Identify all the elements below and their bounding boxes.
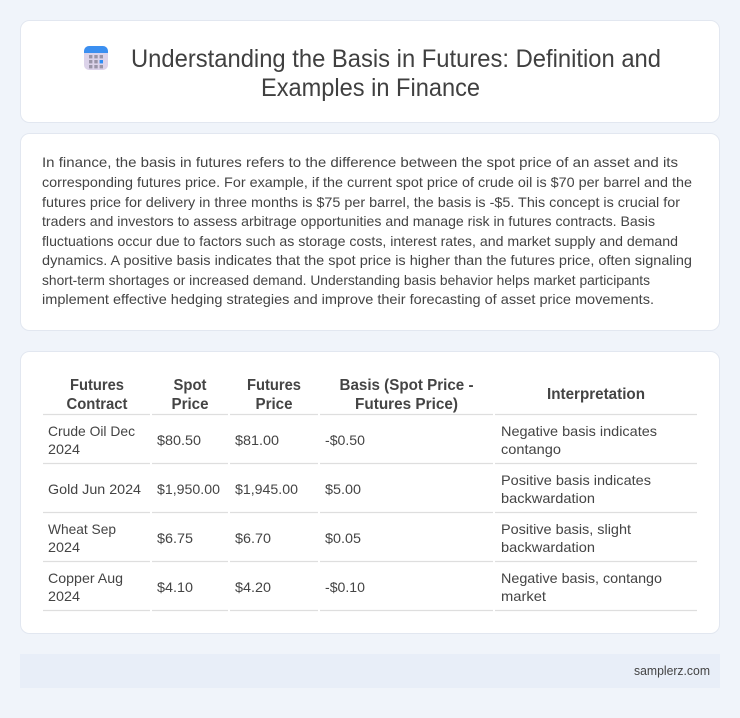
table row: wheat: Wheat Sep [48,521,116,537]
table row: gold: Gold Jun 2024 [48,481,141,497]
title: Examples in Finance [261,74,480,102]
text block: definition: implement effective hedging strategies and improve their forecasting of asset price movements. [42,291,654,307]
title [131,45,661,102]
table row: wheat: $6.70 [235,530,271,546]
table row: wheat: backwardation [501,539,595,555]
panel: intro paragraph [20,134,720,330]
table row: wheat: Positive basis, slight [501,521,631,537]
table row: copper: Copper Aug [48,570,123,586]
panel: futures table [20,352,720,634]
table row: copper [48,570,662,604]
table row: gold [48,472,651,506]
table header row: Contract [66,396,128,413]
table header row [66,377,645,413]
text block: definition: traders and investors to assess arbitrage opportunities and manage risk in futures contracts. Basis [42,213,655,229]
table row: wheat: $6.75 [157,530,193,546]
table header row: Futures [70,377,124,394]
table row: copper: 2024 [48,588,80,604]
table row: crude oil [48,423,657,457]
table row: crude oil: -$0.50 [325,432,365,448]
table row: crude oil: Negative basis indicates [501,423,657,439]
footer text: samplerz.com [634,664,710,678]
table row: gold: backwardation [501,490,595,506]
table row: crude oil: contango [501,441,561,457]
table row: copper: -$0.10 [325,579,365,595]
table row: copper: Negative basis, contango [501,570,662,586]
table row: crude oil: Crude Oil Dec [48,423,135,439]
table row: wheat: $0.05 [325,530,361,546]
table row: copper: $4.20 [235,579,271,595]
panel: footer [20,654,720,688]
text block: definition: fluctuations occur due to factors such as storage costs, interest rates, and market supply and demand [42,233,678,249]
panel: title header [20,20,720,122]
icon: calendar [84,46,108,70]
table header row: Basis (Spot Price - [340,377,474,394]
text block: definition: corresponding futures price. For example, if the current spot price of crude oil is $70 per barrel and the [42,174,692,190]
table row: wheat: 2024 [48,539,80,555]
table row: wheat [48,521,631,555]
table header row: Spot [174,377,207,394]
table row: gold: $1,945.00 [235,481,298,497]
table row: copper: $4.10 [157,579,193,595]
table row: crude oil: $80.50 [157,432,201,448]
table row: copper: market [501,588,546,604]
text block: definition: short-term shortages or increased demand. Understanding basis behavior helps market participants [42,272,650,288]
table row: crude oil: 2024 [48,441,80,457]
table header row: Futures [247,377,301,394]
table row: gold: $1,950.00 [157,481,220,497]
table header row: Interpretation [547,386,645,403]
text block: definition: In finance, the basis in futures refers to the difference between the spot price of an asset and its [42,154,678,170]
text block: definition: dynamics. A positive basis indicates that the spot price is higher than the futures price, often signaling [42,252,692,268]
table header row: Price [256,396,293,413]
table header row: Price [172,396,209,413]
title: Understanding the Basis in Futures: Definition and [131,45,661,73]
table header row: Futures Price) [355,396,458,413]
table row: crude oil: $81.00 [235,432,279,448]
table row: gold: Positive basis indicates [501,472,651,488]
text block: definition: futures price for delivery in three months is $75 per barrel, the basis is -$5. This concept is crucial for [42,194,680,210]
text block: definition [42,154,692,307]
table row: gold: $5.00 [325,481,361,497]
